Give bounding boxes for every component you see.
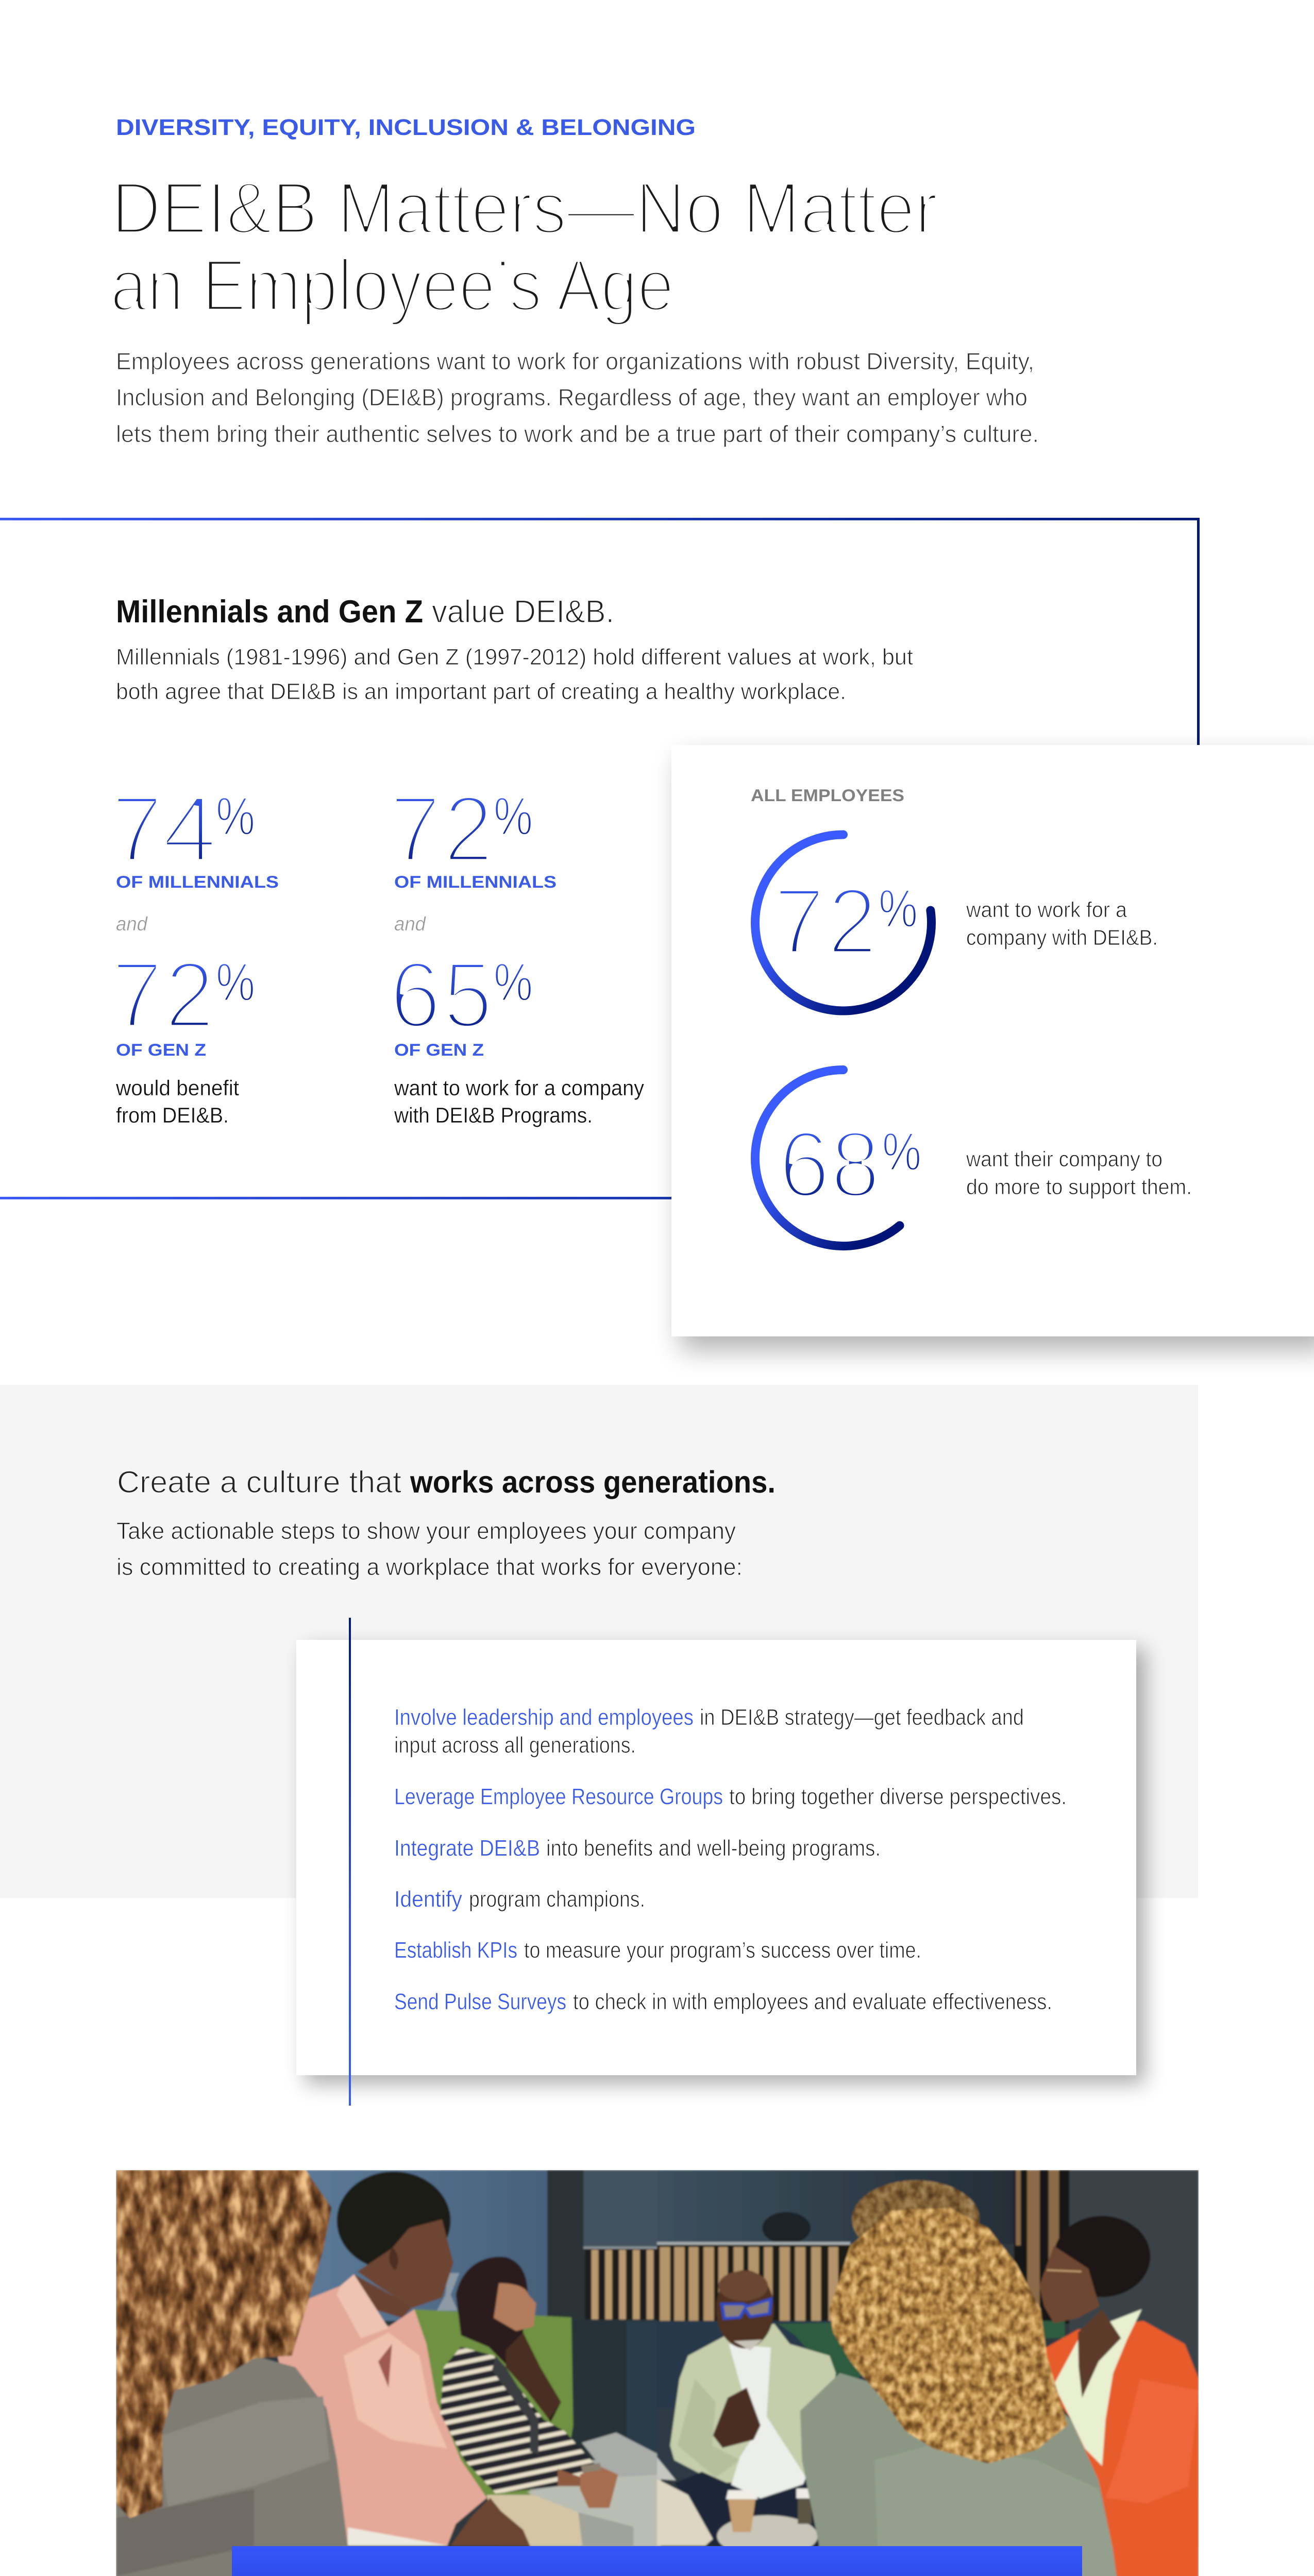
stat column: would benefit <box>111 776 279 1127</box>
item: integrate DEI&B: into benefits and well-being programs. <box>546 1836 881 1861</box>
ring chart: 72%: 2 <box>828 868 877 974</box>
item: establish KPIs: Establish KPIs <box>394 1938 517 1963</box>
section heading: create a culture: works across generations. <box>410 1465 776 1499</box>
caption: would benefit: would benefit <box>115 1076 239 1100</box>
item: establish KPIs: to measure your program’s success over time. <box>524 1938 921 1963</box>
intro paragraph: Inclusion and Belonging (DEI&B) programs. Regardless of age, they want an employer who <box>116 384 1027 411</box>
label: all employees: ALL EMPLOYEES <box>751 786 904 805</box>
caption: want their company to do more <box>966 1147 1192 1199</box>
ring chart: 72%: % <box>879 879 918 939</box>
label: of gen z: OF GEN Z <box>394 1040 484 1059</box>
stat: 65% of gen z <box>390 942 533 1047</box>
stat: 72% of millennials <box>390 776 533 882</box>
stat: 72% of gen z: 7 <box>111 942 163 1047</box>
item: pulse surveys <box>394 1989 1052 2014</box>
photo: group of colleagues in discussion <box>116 2170 1199 2576</box>
section intro text: both agree that DEI&B is an important part of creating a healthy workplace. <box>116 679 846 704</box>
section intro text: actionable steps <box>116 1517 743 1580</box>
caption: want their company to do more: want their company to <box>966 1147 1163 1171</box>
label: of millennials: OF MILLENNIALS <box>394 872 557 891</box>
section intro text: Millennials (1981-1996) and Gen Z (1997-2012) hold different values at work, but <box>116 645 913 670</box>
title: an Employee’s Age <box>110 245 674 327</box>
stat: 74% of millennials: 4 <box>162 776 217 882</box>
intro paragraph <box>116 348 1039 447</box>
stat: 72% of millennials: 2 <box>444 776 493 882</box>
photo left half <box>116 2170 661 2576</box>
card: all employees <box>671 745 1314 1350</box>
caption: want to work for a company: want to work for a company <box>394 1076 644 1100</box>
stat: 65% of gen z: % <box>494 953 533 1012</box>
stat: 72% of millennials: % <box>494 787 533 846</box>
stat: 72% of gen z: 2 <box>165 942 214 1047</box>
caption: want their company to do more: do more to support them. <box>966 1175 1192 1199</box>
item: involve leadership: in DEI&B strategy—get feedback and <box>700 1705 1024 1730</box>
intro paragraph: Employees across generations want to work for organizations with robust Diversity, Equity, <box>116 348 1034 375</box>
panel frame: millennials and gen z <box>0 518 1200 1199</box>
item: integrate DEI&B: Integrate DEI&B <box>394 1836 540 1861</box>
ring chart: 68%: 8 <box>831 1111 880 1217</box>
title: DEI&B Matters—No Matter <box>111 167 938 249</box>
stat: 72% of gen z: % <box>216 953 255 1012</box>
stat column: want to work <box>390 776 644 1127</box>
section heading: millennials and gen z: Millennials and Gen Z <box>116 594 423 630</box>
stat: 74% of millennials: 7 <box>111 776 163 882</box>
ring chart: 68%: 6 <box>779 1111 830 1217</box>
item: involve leadership <box>394 1705 1024 1758</box>
photo right half <box>657 2170 1199 2576</box>
caption: want to work for a company: with DEI&B Programs. <box>394 1103 593 1127</box>
panel: create a culture background <box>0 1385 1198 1898</box>
caption: want to work for a company with DEI&B <box>966 897 1158 950</box>
caption: would benefit <box>115 1076 239 1127</box>
caption: want to work for a company with DEI&B: company with DEI&B. <box>966 925 1158 950</box>
stat: 74% of millennials: % <box>216 787 255 846</box>
connector: and: and <box>394 913 427 935</box>
connector: and: and <box>116 913 148 935</box>
stat: 72% of millennials: 7 <box>390 776 441 882</box>
item: employee resource groups: to bring together diverse perspectives. <box>729 1784 1067 1809</box>
intro paragraph: lets them bring their authentic selves to work and be a true part of their company’s culture. <box>116 420 1039 447</box>
stat: 65% of gen z: 5 <box>443 942 493 1047</box>
title <box>110 167 938 327</box>
caption: want to work for a company <box>394 1076 644 1127</box>
caption: would benefit: from DEI&B. <box>116 1103 229 1127</box>
stat: 72% of gen z <box>111 942 255 1047</box>
call to action box <box>232 2546 1082 2576</box>
eyebrow heading: DIVERSITY, EQUITY, INCLUSION & BELONGING <box>116 115 696 140</box>
item: employee resource groups: Leverage Employee Resource Groups <box>394 1784 723 1809</box>
ring chart: 72% <box>755 835 931 1011</box>
item: identify champions: program champions. <box>469 1887 645 1912</box>
label: of millennials: OF MILLENNIALS <box>116 872 279 891</box>
item: pulse surveys: to check in with employees and evaluate effectiveness. <box>573 1989 1052 2014</box>
section heading: millennials and gen z: value DEI&B. <box>432 594 614 630</box>
stat: 65% of gen z: 6 <box>390 942 441 1047</box>
item: involve leadership: input across all generations. <box>394 1733 636 1758</box>
item: establish KPIs <box>394 1938 921 1963</box>
item: employee resource groups <box>394 1784 1067 1809</box>
card: action list <box>296 1618 1145 2106</box>
item: pulse surveys: Send Pulse Surveys <box>394 1989 566 2014</box>
item: integrate DEI&B <box>394 1836 881 1861</box>
ring chart: 68%: % <box>882 1122 921 1182</box>
item: identify champions: Identify <box>394 1887 462 1912</box>
ring chart: 72%: 7 <box>773 868 825 974</box>
section intro text: actionable steps: is committed to creating a workplace that works for everyone: <box>116 1553 743 1580</box>
label: of gen z: OF GEN Z <box>116 1040 206 1059</box>
item: identify champions <box>394 1887 645 1912</box>
accent vertical line <box>349 1618 351 2106</box>
section heading: millennials and gen z <box>116 594 614 630</box>
stat: 74% of millennials <box>111 776 255 882</box>
section heading: create a culture: Create a culture that <box>117 1465 401 1499</box>
ring chart: 68% <box>755 1070 921 1246</box>
section heading: create a culture <box>117 1465 776 1499</box>
item: involve leadership: Involve leadership and employees <box>394 1705 694 1730</box>
section intro text: actionable steps: Take actionable steps to show your employees your company <box>116 1517 736 1544</box>
section intro text <box>116 645 913 704</box>
caption: want to work for a company with DEI&B: want to work for a <box>966 897 1127 922</box>
